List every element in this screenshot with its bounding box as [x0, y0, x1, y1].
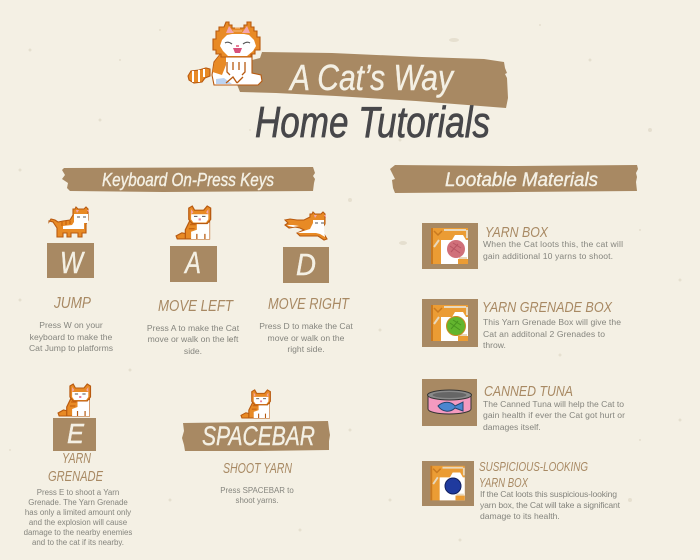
- title: A Cat's Way: A Cat’s Way: [288, 57, 455, 98]
- description D: move or walk on the: [268, 333, 345, 343]
- label SHOOT YARN: SHOOT YARN: [223, 460, 292, 477]
- heading banner: Lootable Materials: [390, 165, 638, 193]
- A key group: [147, 206, 240, 356]
- D key group: [259, 212, 353, 354]
- description yarn grenade box: This Yarn Grenade Box will give the: [483, 317, 621, 327]
- E key group: [24, 384, 132, 547]
- spacebar banner: [182, 421, 330, 451]
- icon: yarn grenade box: [422, 299, 478, 347]
- description E: has only a limited amount only: [25, 508, 131, 517]
- label MOVE LEFT: MOVE LEFT: [158, 298, 234, 315]
- icon: sitting cat: [176, 206, 211, 239]
- description canned tuna: The Canned Tuna will help the Cat to: [483, 399, 624, 409]
- title: Home Tutorials: Home Tutorials: [255, 98, 490, 147]
- description suspicious yarn box: If the Cat loots this suspicious-looking: [480, 489, 617, 499]
- item: yarn box: [422, 223, 623, 269]
- spacebar group: [182, 390, 330, 505]
- description canned tuna: gain health if ever the Cat got hurt or: [483, 410, 625, 420]
- description W: Cat Jump to platforms: [29, 343, 113, 353]
- key letter D: D: [296, 247, 316, 282]
- icon: leaping cat: [285, 212, 327, 240]
- label YARN GRENADE: GRENADE: [48, 468, 104, 485]
- description E: and the explosion will cause: [29, 518, 128, 527]
- description E: Grenade. The Yarn Grenade: [28, 498, 128, 507]
- description suspicious yarn box: yarn box, the Cat will take a significant: [480, 500, 621, 510]
- title banner: [235, 52, 508, 108]
- description A: move or walk on the left: [148, 334, 239, 344]
- label suspicious-looking yarn box: YARN BOX: [479, 475, 529, 490]
- W key group: [29, 207, 113, 353]
- description canned tuna: damages itself.: [483, 422, 541, 432]
- heading: Lootable Materials: Lootable Materials: [445, 170, 598, 191]
- description spacebar: Press SPACEBAR to: [220, 486, 294, 495]
- description E: and to the cat if its nearby.: [32, 538, 124, 547]
- description E: Press E to shoot a Yarn: [37, 488, 119, 497]
- description W: keyboard to make the: [30, 332, 113, 342]
- icon: big sitting cat: [188, 22, 262, 85]
- description W: Press W on your: [39, 320, 103, 330]
- label YARN GRENADE: YARN: [62, 450, 91, 467]
- item: suspicious yarn box: [422, 459, 621, 521]
- description yarn box: When the Cat loots this, the cat will: [483, 239, 623, 249]
- item: yarn grenade box: [422, 299, 621, 350]
- label JUMP: JUMP: [53, 295, 91, 312]
- label canned tuna: CANNED TUNA: [484, 383, 573, 400]
- description D: right side.: [287, 344, 325, 354]
- heading banner: Keyboard On-Press Keys: [62, 167, 315, 192]
- description suspicious yarn box: damage to its health.: [480, 511, 560, 521]
- description spacebar: shoot yarns.: [236, 496, 278, 505]
- key label SPACEBAR: SPACEBAR: [202, 421, 315, 451]
- label MOVE RIGHT: MOVE RIGHT: [268, 296, 350, 313]
- label yarn box: YARN BOX: [485, 224, 549, 241]
- key D: [283, 247, 329, 283]
- key letter W: W: [60, 245, 85, 280]
- description yarn box: gain additional 10 yarns to shoot.: [483, 251, 613, 261]
- key A: [170, 246, 217, 282]
- description yarn grenade box: Cat an additonal 2 Grenades to: [483, 329, 605, 339]
- description E: damage to the nearby enemies: [24, 528, 132, 537]
- heading: Keyboard On-Press Keys: Keyboard On-Press Keys: [102, 170, 274, 190]
- label yarn grenade box: YARN GRENADE BOX: [482, 299, 613, 316]
- description yarn grenade box: throw.: [483, 340, 506, 350]
- description A: Press A to make the Cat: [147, 323, 240, 333]
- icon: canned tuna: [422, 379, 477, 426]
- icon: walking cat: [49, 207, 89, 237]
- key W: [47, 243, 94, 278]
- description A: side.: [184, 346, 202, 356]
- key E: [53, 418, 96, 451]
- key letter E: E: [67, 418, 84, 449]
- icon: yarn box: [422, 223, 478, 269]
- key letter A: A: [183, 245, 201, 280]
- icon: suspicious yarn box: [422, 461, 474, 506]
- description D: Press D to make the Cat: [259, 321, 353, 331]
- icon: jumping cat: [58, 384, 90, 416]
- icon: sitting cat: [241, 390, 270, 418]
- label suspicious-looking yarn box: SUSPICIOUS-LOOKING: [479, 459, 588, 474]
- item: canned tuna: [422, 379, 625, 432]
